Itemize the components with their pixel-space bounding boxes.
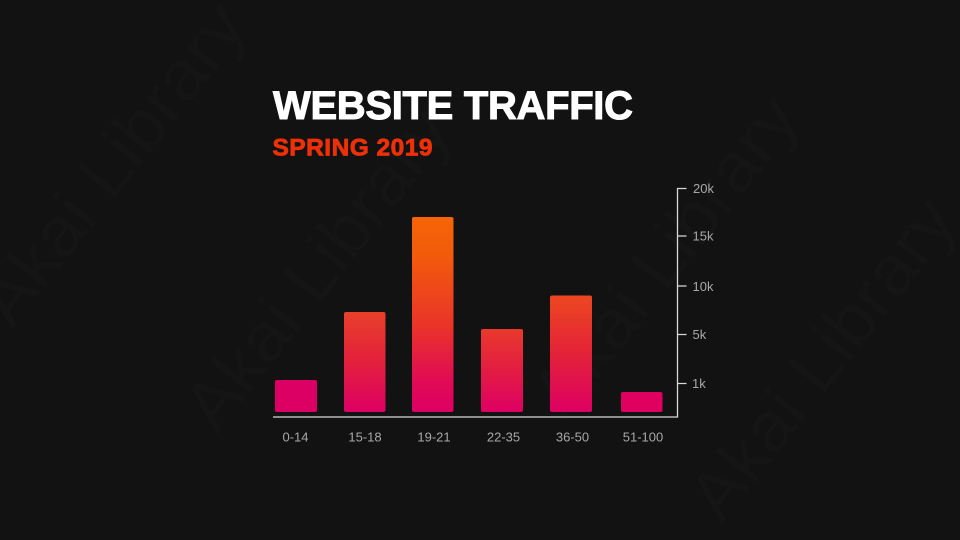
- x axis labels: 0-14: [282, 430, 309, 444]
- bars: [275, 217, 662, 412]
- bar chart: [273, 181, 714, 444]
- watermarks: Akai Library: [515, 80, 814, 431]
- subtitle: SPRING 2019: [272, 134, 432, 162]
- y axis labels: [692, 181, 714, 391]
- y axis labels: 5k: [692, 327, 707, 342]
- y axis labels: 10k: [692, 279, 714, 294]
- y axis labels: 15k: [692, 228, 714, 244]
- x axis labels: 22-35: [487, 430, 520, 444]
- x axis labels: 19-21: [417, 430, 451, 444]
- y axis labels: 20k: [693, 181, 714, 196]
- x axis labels: [282, 430, 663, 444]
- watermarks: Akai Library: [167, 93, 466, 444]
- y axis labels: 1k: [692, 376, 706, 391]
- x axis labels: 36-50: [556, 430, 589, 444]
- title: WEBSITE TRAFFIC: [273, 84, 633, 128]
- x axis labels: 51-100: [623, 430, 663, 444]
- axes: [273, 188, 686, 417]
- x axis labels: 15-18: [348, 430, 382, 444]
- watermarks: Akai Library: [672, 183, 960, 534]
